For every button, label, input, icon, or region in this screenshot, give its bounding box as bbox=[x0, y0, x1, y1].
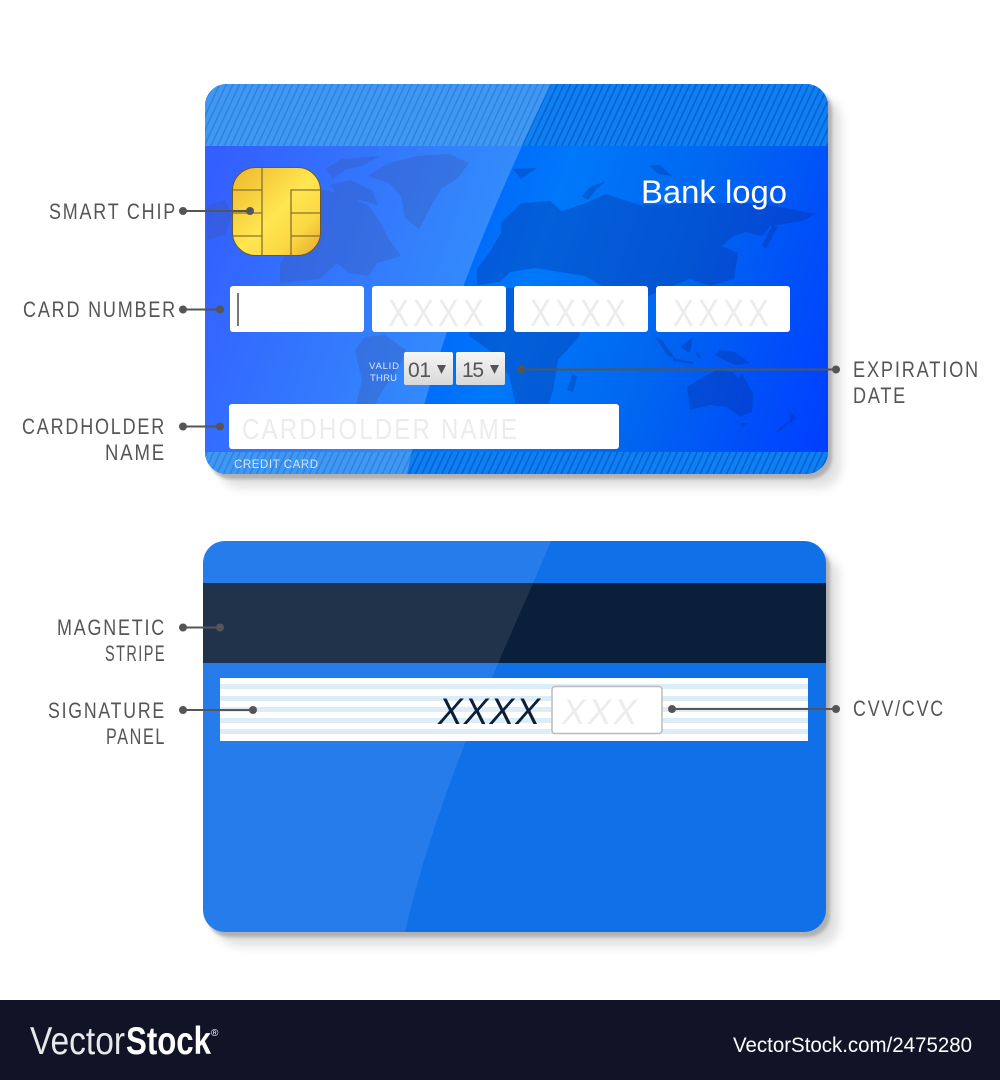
smart chip bbox=[232, 168, 320, 256]
footer logo: ® bbox=[211, 1028, 219, 1039]
cvv box: XXX bbox=[561, 693, 639, 732]
label: magnetic stripe: MAGNETIC bbox=[57, 615, 166, 640]
label: expiration date bbox=[517, 357, 980, 408]
gloss reflection bbox=[205, 84, 551, 474]
label: smart chip: SMART CHIP bbox=[49, 199, 177, 224]
footer logo: Vector bbox=[30, 1020, 125, 1063]
expiry month selector: 01 bbox=[408, 359, 431, 382]
cvv box bbox=[552, 686, 662, 734]
field 2: XXXX bbox=[388, 293, 488, 335]
bottom hatched band bbox=[205, 452, 828, 474]
label: magnetic stripe: STRIPE bbox=[105, 641, 166, 666]
label: signature panel: SIGNATURE bbox=[48, 698, 166, 723]
signature panel bbox=[220, 678, 808, 741]
credit card text: CREDIT CARD bbox=[234, 459, 318, 471]
footer logo bbox=[30, 1020, 219, 1063]
card number fields bbox=[230, 286, 790, 335]
cardholder name field: CARDHOLDER NAME bbox=[242, 414, 519, 446]
valid thru text: VALID bbox=[369, 361, 399, 372]
label: cardholder name: NAME bbox=[105, 440, 166, 465]
top hatched band bbox=[205, 84, 828, 146]
signature digits: XXXX bbox=[437, 691, 541, 732]
bank logo: Bank logo bbox=[641, 174, 787, 210]
panel: card back bbox=[203, 541, 839, 946]
expiry month selector bbox=[404, 352, 453, 385]
field 4: XXXX bbox=[673, 293, 773, 335]
gloss reflection bbox=[203, 541, 551, 932]
label: cvv/cvc bbox=[668, 696, 945, 721]
label: expiration date: DATE bbox=[853, 383, 907, 408]
expiry year selector bbox=[456, 352, 505, 385]
field 3: XXXX bbox=[530, 293, 630, 335]
label: card number: CARD NUMBER bbox=[23, 297, 177, 322]
field 1 with cursor bbox=[230, 286, 364, 332]
card back shadow bbox=[207, 546, 839, 946]
magnetic stripe bbox=[203, 583, 826, 663]
label: signature panel bbox=[48, 698, 257, 749]
valid thru text: THRU bbox=[370, 373, 397, 384]
label: signature panel: PANEL bbox=[106, 724, 166, 749]
world map bbox=[207, 154, 815, 433]
footer logo: Stock bbox=[126, 1020, 211, 1063]
footer bar bbox=[0, 1000, 1000, 1080]
card front shadow bbox=[209, 89, 841, 488]
panel: card front bbox=[205, 84, 841, 488]
cardholder name field bbox=[229, 404, 619, 449]
card back body bbox=[203, 541, 826, 932]
label: magnetic stripe bbox=[57, 615, 224, 666]
label: cardholder name: CARDHOLDER bbox=[22, 414, 166, 439]
expiry year selector: 15 bbox=[462, 359, 484, 382]
card front body bbox=[205, 84, 828, 474]
valid thru text bbox=[369, 361, 399, 384]
label: cardholder name bbox=[22, 414, 224, 465]
label: cvv/cvc: CVV/CVC bbox=[853, 696, 945, 721]
footer url: VectorStock.com/2475280 bbox=[733, 1034, 972, 1057]
